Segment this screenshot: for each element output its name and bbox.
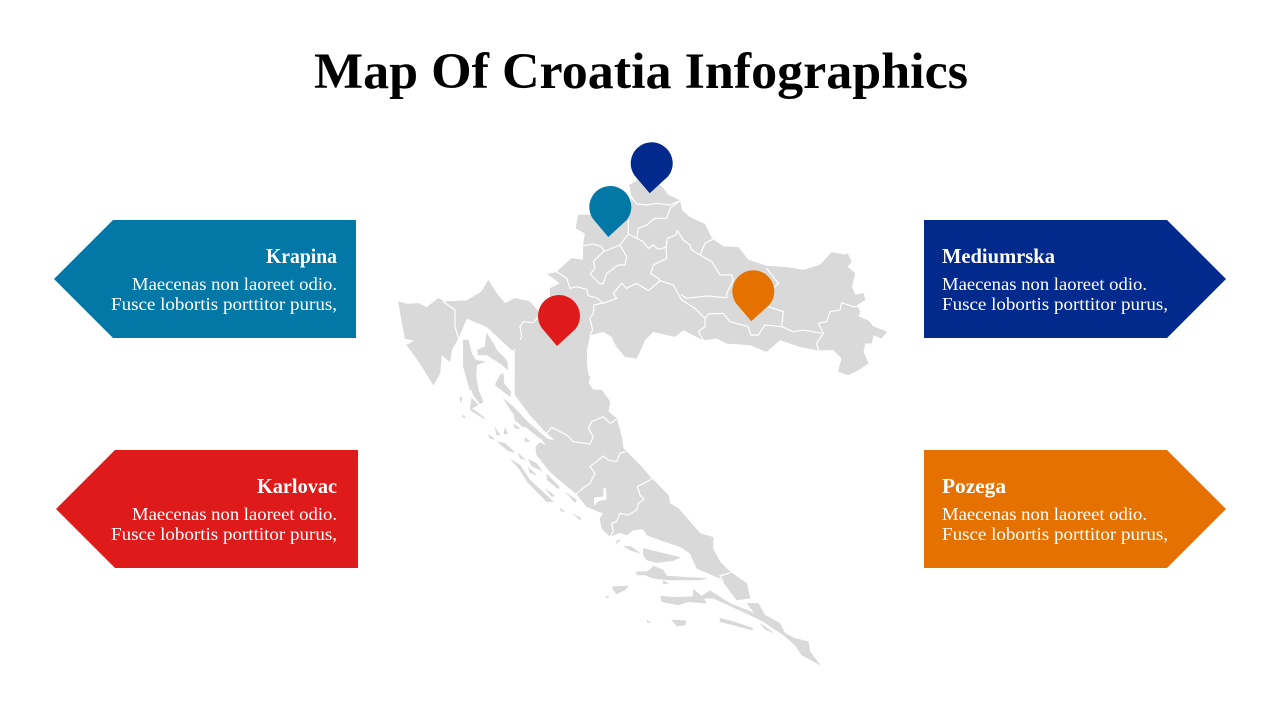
map of Croatia <box>398 180 887 665</box>
pin: Krapina <box>589 186 631 237</box>
text: Karlovac description: Fusce lobortis porttitor purus, <box>111 524 337 544</box>
pin: Mediumrska <box>631 142 673 193</box>
panel: Krapina <box>54 220 356 338</box>
text: Krapina description: Maecenas non laoreet odio. <box>132 274 337 294</box>
panel: Karlovac <box>56 450 358 568</box>
panel: Pozega <box>924 450 1226 568</box>
text: Pozega description: Maecenas non laoreet odio. <box>942 504 1147 524</box>
heading: Krapina: Krapina <box>266 244 337 268</box>
title: Map Of Croatia Infographics <box>314 44 968 100</box>
pin: Karlovac <box>538 295 580 346</box>
panel: Mediumrska <box>924 220 1226 338</box>
heading: Karlovac: Karlovac <box>257 474 337 498</box>
heading: Mediumrska: Mediumrska <box>942 244 1055 268</box>
text: Mediumrska description: Maecenas non laoreet odio. <box>942 274 1147 294</box>
pin: Pozega <box>732 270 774 321</box>
text: Pozega description: Fusce lobortis porttitor purus, <box>942 524 1168 544</box>
text: Mediumrska description: Fusce lobortis porttitor purus, <box>942 294 1168 314</box>
heading: Pozega: Pozega <box>942 474 1006 498</box>
text: Karlovac description: Maecenas non laoreet odio. <box>132 504 337 524</box>
text: Krapina description: Fusce lobortis porttitor purus, <box>111 294 337 314</box>
